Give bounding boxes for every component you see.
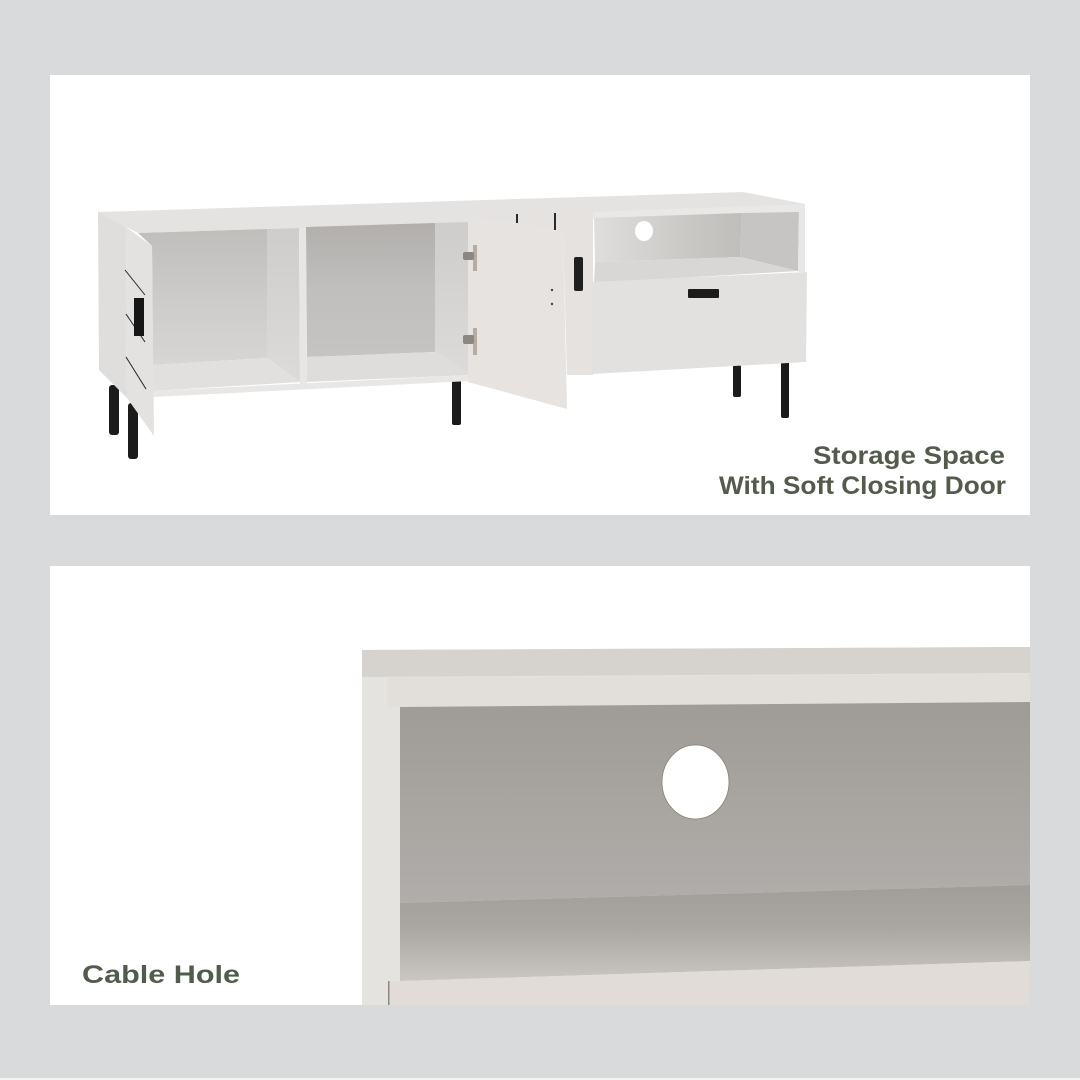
illustration: shelf close-up: [362, 647, 1030, 1005]
caption: storage space: With Soft Closing Door: [719, 472, 1006, 500]
shelf floor: [400, 885, 1030, 981]
caption: storage space: [719, 442, 1006, 500]
top surface: [98, 192, 805, 233]
back slots: [516, 214, 518, 223]
icon: cable hole: [635, 221, 653, 241]
right compartment: [306, 222, 470, 382]
icon: large cable hole: [662, 745, 729, 819]
bottom lip: [389, 961, 1030, 1005]
caption: storage space: Storage Space: [813, 442, 1005, 470]
front lip: [387, 674, 1030, 707]
back wall: [400, 702, 1030, 903]
left compartment: [138, 227, 307, 391]
open niche: [594, 211, 805, 283]
hinges: [463, 245, 477, 355]
legs: [109, 360, 789, 459]
panel: storage space: [50, 75, 1030, 515]
right body front: [468, 213, 593, 375]
top surface band: [362, 647, 1030, 677]
illustration: open TV cabinet: [98, 192, 807, 459]
open right door: [468, 216, 567, 409]
caption: cable hole: Cable Hole: [82, 961, 240, 989]
panel: cable hole: [50, 566, 1030, 1005]
open left door: [125, 227, 154, 436]
right door handle: [574, 257, 583, 291]
left side panel: [98, 212, 127, 398]
drawer: [592, 272, 807, 374]
bottom edge: [153, 375, 470, 397]
drawer handle: [688, 289, 719, 298]
left door handle: [134, 298, 144, 336]
